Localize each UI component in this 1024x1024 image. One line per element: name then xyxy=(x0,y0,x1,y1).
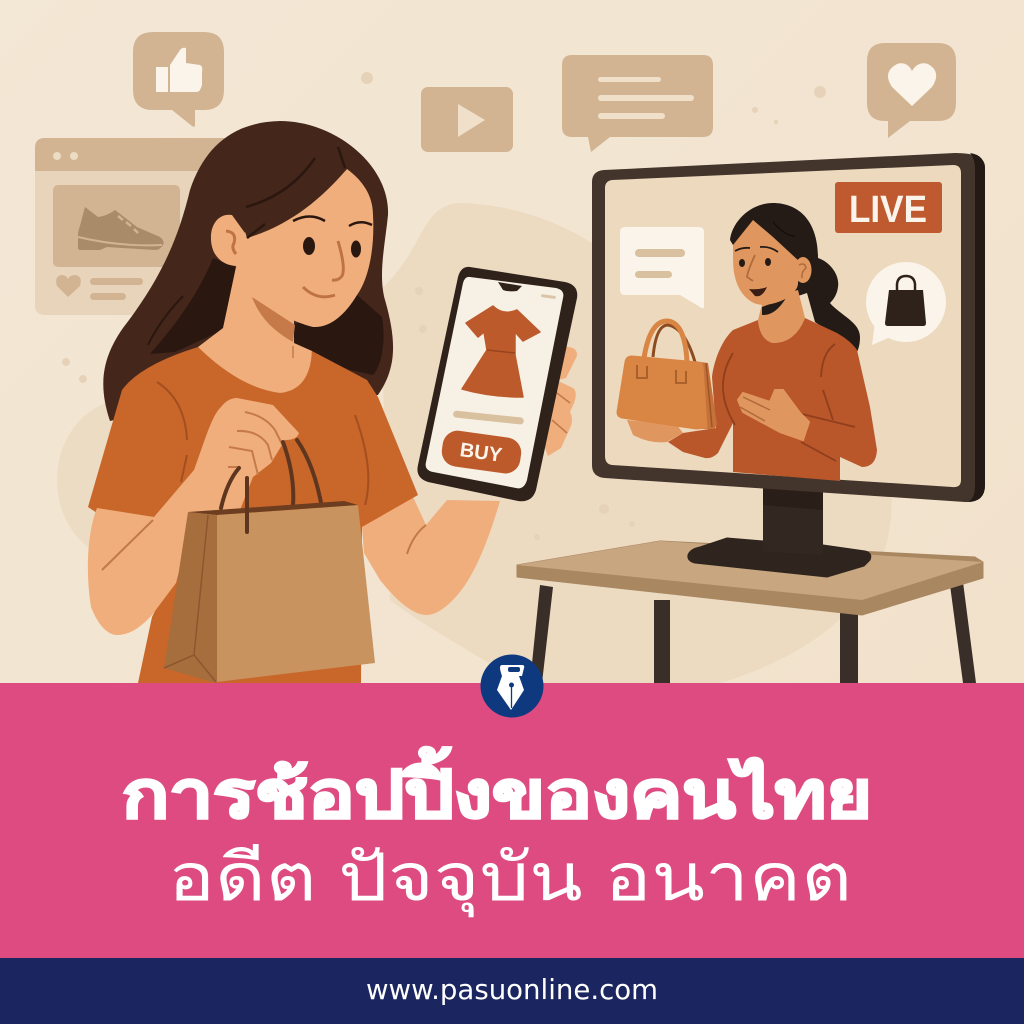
shopping bag xyxy=(164,440,375,682)
title line 2: อดีต ปัจจุบัน อนาคต xyxy=(168,840,852,918)
table xyxy=(517,541,983,683)
nose and mouth xyxy=(303,241,343,297)
ear xyxy=(211,215,250,266)
fingers behind phone xyxy=(538,345,577,456)
shirt xyxy=(88,347,418,683)
monitor xyxy=(592,153,985,577)
panel: browser product card xyxy=(35,138,225,315)
icon: thumbs up bubble xyxy=(133,32,224,127)
seller supporting hand xyxy=(627,420,683,442)
hair front xyxy=(240,145,347,238)
footer bar: www.pasuonline.com xyxy=(366,973,658,1006)
seller open hand xyxy=(738,390,809,440)
buy button: BUY xyxy=(458,439,504,467)
buy button xyxy=(440,429,523,475)
bag bubble xyxy=(866,262,946,345)
woman holding phone and bag xyxy=(88,121,577,683)
logo: pen nib xyxy=(480,654,544,718)
footer bar xyxy=(0,958,1024,1024)
seller face xyxy=(733,220,800,305)
icon: chat bubble xyxy=(562,55,713,152)
right arm xyxy=(362,497,500,615)
phone with dress and buy button xyxy=(417,267,577,501)
title banner xyxy=(0,683,1024,958)
icon: heart bubble xyxy=(867,43,956,138)
handbag xyxy=(617,321,717,429)
dress xyxy=(462,306,540,397)
monitor screen xyxy=(605,165,961,487)
live badge: LIVE xyxy=(849,189,927,231)
icon: video play xyxy=(421,87,513,152)
face xyxy=(238,169,373,327)
holding hand xyxy=(154,398,299,540)
title line 1: การช้อปปิ้งของคนไทย xyxy=(122,746,872,831)
icon: shoe xyxy=(78,207,164,250)
seller sleeve and body xyxy=(668,318,877,481)
hair back xyxy=(103,121,393,421)
left arm xyxy=(88,508,190,635)
seller figure xyxy=(627,203,877,481)
seller neck xyxy=(758,290,805,343)
seller hair xyxy=(730,203,860,352)
neck xyxy=(198,262,312,393)
icon: heart xyxy=(56,275,81,297)
live badge xyxy=(835,182,942,233)
chat card xyxy=(620,227,704,308)
eyes and brows xyxy=(303,237,315,255)
